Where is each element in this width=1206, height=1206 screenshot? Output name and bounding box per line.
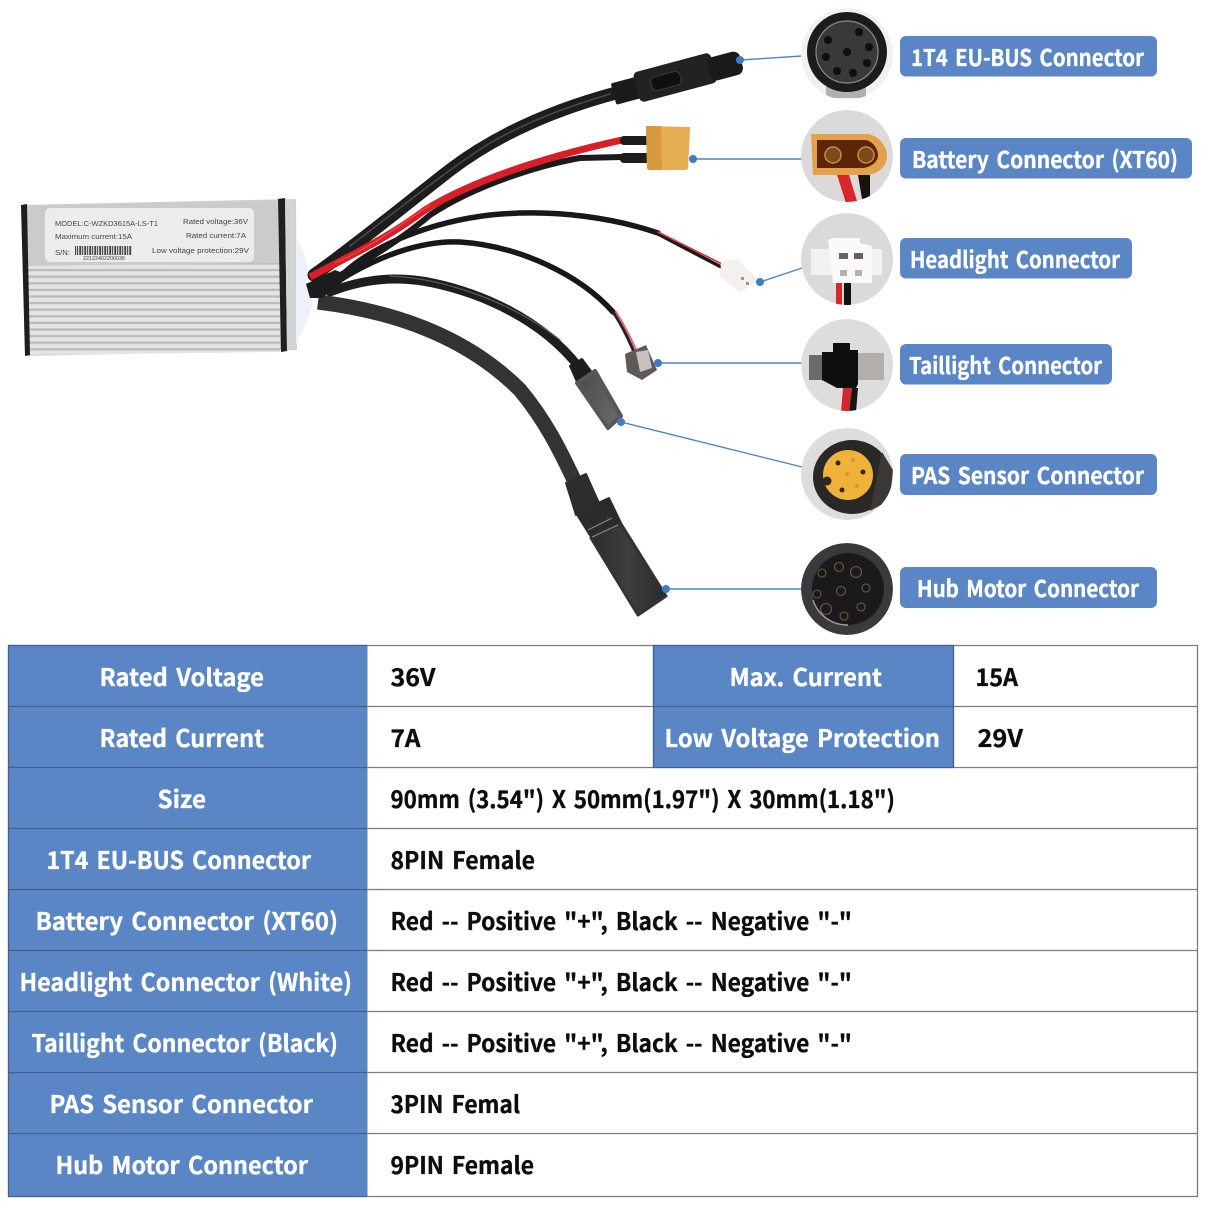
row: hub motor connector: Hub Motor Connector (56, 1146, 309, 1181)
row: hub motor connector (56, 1146, 534, 1181)
row: battery connector (36, 902, 852, 937)
label: 1T4 EU-BUS Connector: 1T4 EU-BUS Connector (911, 39, 1145, 73)
controller label: Maximum current:15A (55, 234, 132, 241)
row: hub motor connector: 9PIN Female (390, 1146, 534, 1181)
icon: battery connector closeup (801, 110, 893, 203)
row: size: Size (158, 780, 206, 815)
icon: hub motor connector closeup (801, 543, 893, 635)
controller label: Low voltage protection:29V (152, 248, 249, 255)
label: PAS Sensor Connector: PAS Sensor Connector (911, 457, 1145, 491)
row: rated voltage and max current: Rated Voltage (100, 658, 264, 693)
controller label (45, 208, 254, 262)
icon: headlight connector closeup (801, 213, 893, 307)
row: taillight connector (32, 1024, 852, 1059)
controller label: 22122402200036 (83, 256, 125, 262)
row: EU-BUS connector: 8PIN Female (390, 841, 535, 876)
specification table (8, 645, 1198, 1197)
connector: headlight plug (721, 260, 757, 291)
connector: XT60 plug (620, 126, 690, 170)
cable: battery (310, 140, 622, 288)
controller label: S/N: (55, 250, 70, 257)
row: rated voltage and max current (100, 658, 1019, 693)
leader line: headlight (756, 268, 802, 286)
controller box (21, 198, 297, 356)
icon: EU-BUS connector closeup (801, 8, 893, 100)
connector: EU-BUS plug (611, 50, 745, 105)
row: size: 90mm (3.54") X 50mm(1.97") X 30mm(1.18") (390, 780, 895, 815)
leader line: taillight (654, 359, 802, 367)
cable: PAS sensor (330, 276, 578, 366)
cable: taillight (340, 242, 636, 352)
row: EU-BUS connector: 1T4 EU-BUS Connector (46, 841, 312, 876)
controller label: Rated current:7A (186, 233, 246, 240)
leader line: EU-BUS (736, 56, 802, 64)
leader line: hub motor (662, 585, 802, 593)
row: rated current and low voltage protection (100, 719, 1023, 754)
leader line: PAS (617, 418, 802, 467)
row: EU-BUS connector (46, 841, 535, 876)
controller label: MODEL:C-WZKD3615A-LS-T1 (55, 221, 158, 228)
row: PAS sensor connector (50, 1085, 520, 1120)
label: Taillight Connector: Taillight Connector (909, 347, 1103, 381)
cable: EU-BUS (314, 93, 616, 275)
controller label: Rated voltage:36V (183, 219, 248, 226)
row: rated current and low voltage protection: Low Voltage Protection (664, 719, 940, 754)
row: rated voltage and max current: 36V (390, 658, 436, 693)
connector: hub motor plug (566, 474, 666, 615)
row: rated voltage and max current: 15A (976, 658, 1019, 693)
row: size (158, 780, 895, 815)
label: Battery Connector (XT60): Battery Connector (XT60) (912, 141, 1178, 175)
row: headlight connector: Red -- Positive "+", Black -- Negative "-" (390, 963, 852, 998)
cable: headlight (345, 213, 724, 272)
row: rated voltage and max current: Max. Current (730, 658, 882, 693)
row: taillight connector: Red -- Positive "+", Black -- Negative "-" (390, 1024, 852, 1059)
cable bundle tape (296, 238, 312, 345)
row: PAS sensor connector: 3PIN Femal (390, 1085, 520, 1120)
icon: taillight connector closeup (801, 319, 893, 412)
row: battery connector: Battery Connector (XT60) (36, 902, 338, 937)
row: rated current and low voltage protection: 7A (390, 719, 421, 754)
connector: taillight plug (625, 345, 657, 380)
row: headlight connector: Headlight Connector (White) (20, 963, 352, 998)
row: headlight connector (20, 963, 852, 998)
row: taillight connector: Taillight Connector (Black) (32, 1024, 338, 1059)
connector: PAS plug (570, 359, 621, 428)
row: rated current and low voltage protection: Rated Current (100, 719, 264, 754)
row: PAS sensor connector: PAS Sensor Connector (50, 1085, 314, 1120)
row: battery connector: Red -- Positive "+", Black -- Negative "-" (390, 902, 852, 937)
label: Hub Motor Connector: Hub Motor Connector (917, 570, 1140, 604)
cable bundle root (306, 270, 350, 298)
cable: hub motor (318, 302, 575, 482)
row: rated current and low voltage protection: 29V (978, 719, 1023, 754)
leader line: battery (689, 155, 802, 163)
label: Headlight Connector: Headlight Connector (910, 241, 1121, 275)
icon: PAS connector closeup (801, 428, 893, 520)
